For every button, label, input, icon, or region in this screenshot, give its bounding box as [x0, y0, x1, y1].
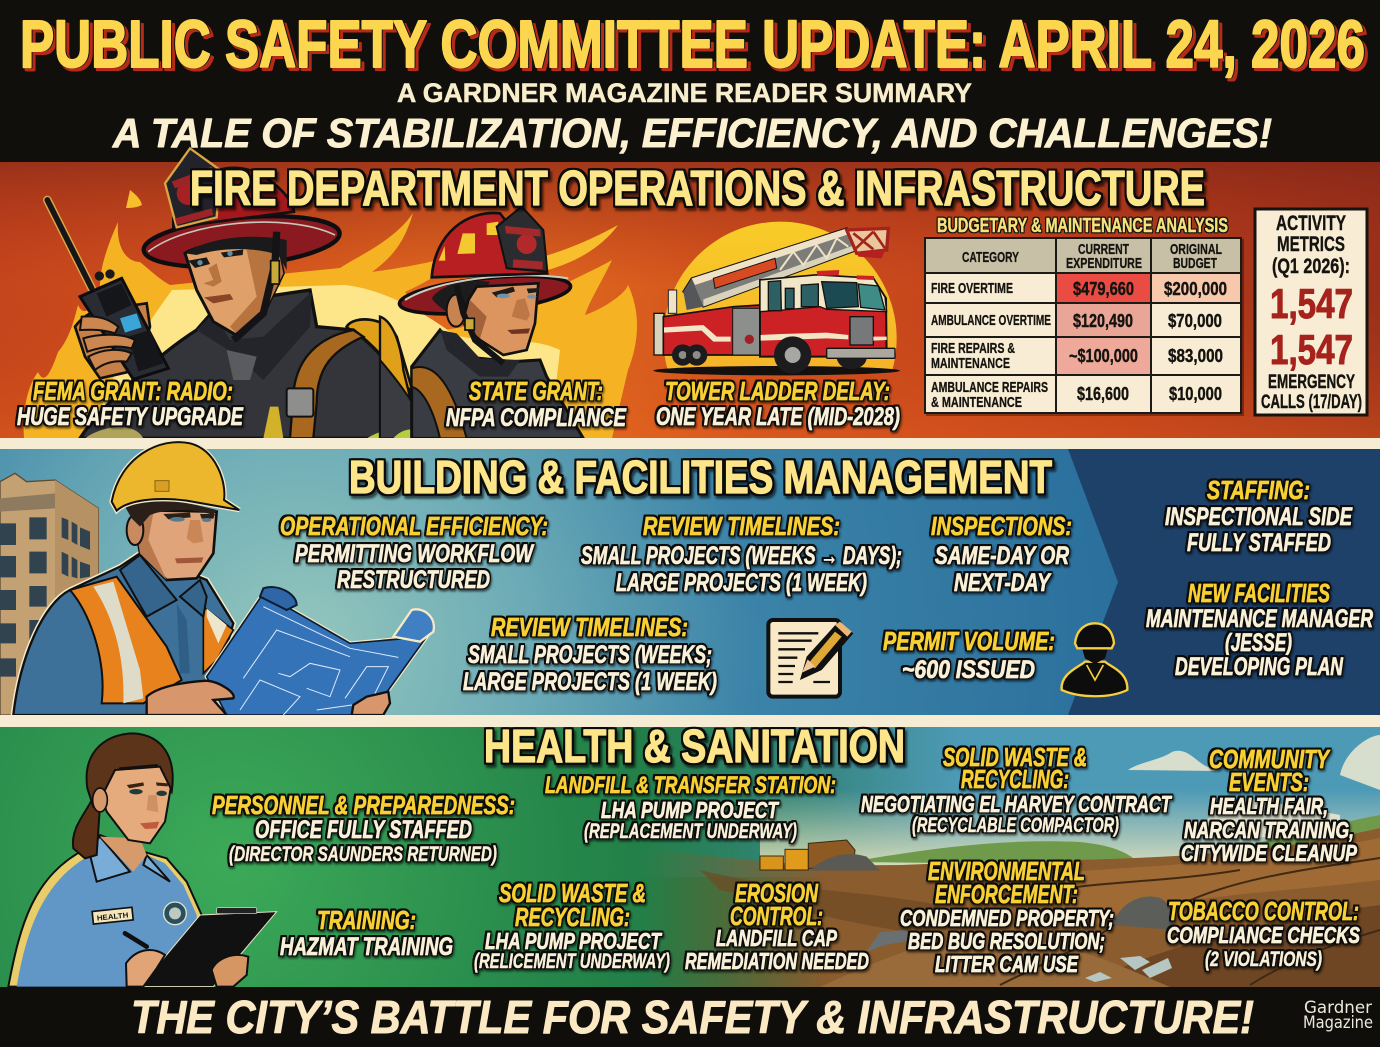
text block: solid waste lower: SOLID WASTE & — [499, 878, 646, 908]
table: budgetary and maintenance analysis: ~$100,000 — [1069, 346, 1138, 366]
text block: landfill and transfer station: LANDFILL & TRANSFER STATION: — [545, 772, 836, 799]
illustration: landfill equipment — [760, 840, 880, 871]
text block: erosion control — [685, 878, 869, 974]
illustration: building — [0, 473, 98, 715]
table: budgetary and maintenance analysis: $479,660 — [1073, 279, 1134, 299]
icon: worker silhouette — [1062, 623, 1127, 696]
illustration: firefighter in profile — [380, 207, 583, 438]
panel: activity metrics: 1,547 — [1270, 280, 1353, 327]
text block: solid waste upper: (RECYCLABLE COMPACTOR) — [912, 814, 1119, 837]
table: budgetary and maintenance analysis: $16,600 — [1077, 384, 1129, 404]
text block: personnel and preparedness: (DIRECTOR SAUNDERS RETURNED) — [229, 843, 497, 866]
text block: training: TRAINING: — [317, 905, 416, 935]
table: budgetary and maintenance analysis: CATEGORY — [962, 249, 1019, 266]
text block: operational efficiency: RESTRUCTURED — [337, 566, 490, 594]
table: budgetary and maintenance analysis: $83,000 — [1168, 346, 1223, 366]
panel: activity metrics: ACTIVITY — [1276, 212, 1346, 235]
logo: Gardner Magazine — [1303, 998, 1373, 1033]
text block: solid waste lower — [474, 878, 670, 973]
panel: footer banner — [0, 987, 1380, 1047]
text block: erosion control: LANDFILL CAP — [716, 925, 837, 951]
table: budgetary and maintenance analysis: $70,000 — [1168, 311, 1222, 331]
callout: tower ladder delay — [656, 376, 900, 431]
text block: community events: COMMUNITY — [1209, 744, 1331, 774]
panel: activity metrics: (Q1 2026): — [1272, 255, 1350, 278]
heading: budget table: BUDGETARY & MAINTENANCE ANALYSIS — [937, 215, 1228, 237]
text block: review timelines upper: SMALL PROJECTS (WEEKS → DAYS); — [581, 542, 902, 570]
callout: state grant — [446, 376, 627, 432]
text block: training: HAZMAT TRAINING — [280, 933, 453, 961]
illustration: health inspector: HEALTH — [96, 910, 129, 923]
table: budgetary and maintenance analysis: MAINTENANCE — [931, 355, 1010, 372]
text block: review timelines lower: SMALL PROJECTS (WEEKS; — [468, 641, 712, 669]
text block: review timelines lower: LARGE PROJECTS (1 WEEK) — [463, 668, 717, 696]
text block: permit volume — [883, 626, 1055, 684]
text block: permit volume: ~600 ISSUED — [902, 656, 1035, 684]
panel: header — [0, 0, 1380, 162]
text block: review timelines lower — [463, 612, 717, 696]
text block: solid waste upper: NEGOTIATING EL HARVEY CONTRACT — [861, 791, 1172, 817]
text block: staffing: STAFFING: — [1207, 475, 1310, 505]
illustration: firefighter with radio — [47, 148, 430, 438]
panel: health and sanitation — [0, 720, 1380, 987]
callout: state grant: NFPA COMPLIANCE — [446, 404, 627, 432]
panel: activity metrics: 1,547 — [1270, 326, 1353, 373]
text block: environmental enforcement: BED BUG RESOLUTION; — [908, 928, 1105, 954]
table: budgetary and maintenance analysis: AMBULANCE REPAIRS — [931, 379, 1048, 396]
panel: staffing chevron — [1068, 449, 1380, 715]
text block: solid waste upper — [861, 742, 1172, 837]
table: budgetary and maintenance analysis: $120,490 — [1073, 311, 1133, 331]
illustration: construction worker with blueprint — [13, 442, 434, 715]
text block: review timelines upper — [581, 511, 902, 597]
table: budgetary and maintenance analysis — [925, 238, 1244, 416]
table: budgetary and maintenance analysis: EXPENDITURE — [1066, 255, 1142, 272]
icon: permit document with pencil — [768, 620, 853, 697]
text block: tobacco control: (2 VIOLATIONS) — [1205, 948, 1322, 971]
illustration: flames — [24, 190, 637, 438]
text block: environmental enforcement: ENFORCEMENT: — [935, 879, 1078, 909]
callout: tower ladder delay: TOWER LADDER DELAY: — [665, 376, 890, 406]
text block: tobacco control — [1167, 896, 1360, 971]
logo: Gardner Magazine: Gardner — [1304, 998, 1372, 1018]
illustration: tower ladder fire truck — [653, 222, 900, 376]
table: budgetary and maintenance analysis: AMBULANCE OVERTIME — [931, 312, 1051, 329]
callout: state grant: STATE GRANT: — [469, 376, 603, 406]
text block: personnel and preparedness: OFFICE FULLY STAFFED — [255, 816, 472, 844]
text block: erosion control: CONTROL: — [730, 901, 823, 931]
text block: solid waste upper: SOLID WASTE & — [943, 742, 1087, 772]
text block: new facilities: (JESSE) — [1225, 629, 1292, 657]
text block: landfill and transfer station: LHA PUMP PROJECT — [601, 797, 779, 823]
panel: activity metrics: METRICS — [1277, 233, 1345, 256]
footer slogan: THE CITY’S BATTLE FOR SAFETY & INFRASTRUCTURE! — [131, 991, 1254, 1043]
text block: staffing: FULLY STAFFED — [1187, 529, 1331, 557]
text block: environmental enforcement: LITTER CAM USE — [935, 951, 1078, 977]
text block: inspections — [931, 511, 1072, 597]
illustration: landfill landscape — [640, 727, 1380, 987]
table: budgetary and maintenance analysis: BUDGET — [1173, 255, 1217, 272]
table: budgetary and maintenance analysis: $10,000 — [1169, 384, 1222, 404]
text block: environmental enforcement: ENVIRONMENTAL — [928, 856, 1085, 886]
table: budgetary and maintenance analysis: CURRENT — [1078, 241, 1129, 258]
text block: solid waste lower: (RELICEMENT UNDERWAY) — [474, 950, 670, 973]
table: budgetary and maintenance analysis: $200,000 — [1164, 279, 1227, 299]
text block: community events — [1181, 744, 1358, 866]
table: budgetary and maintenance analysis: & MAINTENANCE — [931, 394, 1022, 411]
text block: solid waste lower: RECYCLING: — [515, 902, 630, 932]
text block: permit volume: PERMIT VOLUME: — [883, 626, 1055, 656]
text block: inspections: INSPECTIONS: — [931, 511, 1072, 541]
text block: operational efficiency — [280, 511, 548, 594]
tagline: A TALE OF STABILIZATION, EFFICIENCY, AND CHALLENGES! — [112, 110, 1272, 156]
text block: review timelines upper: REVIEW TIMELINES: — [643, 511, 840, 541]
panel: building and facilities management — [0, 442, 1380, 715]
text block: staffing — [1165, 475, 1353, 557]
heading: building and facilities: BUILDING & FACILITIES MANAGEMENT — [349, 451, 1052, 503]
callout: FEMA grant — [17, 376, 244, 431]
text block: operational efficiency: PERMITTING WORKFLOW — [295, 540, 535, 568]
panel: fire department — [0, 148, 1380, 455]
subtitle: A GARDNER MAGAZINE READER SUMMARY — [397, 78, 972, 108]
text block: inspections: SAME-DAY OR — [935, 542, 1069, 570]
text block: personnel and preparedness: PERSONNEL & PREPAREDNESS: — [212, 790, 515, 820]
panel: activity metrics — [1255, 209, 1367, 415]
text block: review timelines upper: LARGE PROJECTS (1 WEEK) — [616, 569, 867, 597]
text block: erosion control: REMEDIATION NEEDED — [685, 948, 869, 974]
text block: operational efficiency: OPERATIONAL EFFICIENCY: — [280, 511, 548, 541]
text block: landfill and transfer station — [545, 772, 836, 843]
table: budgetary and maintenance analysis: ORIGINAL — [1170, 241, 1222, 258]
illustration: health inspector — [8, 733, 277, 987]
text block: landfill and transfer station: (REPLACEMENT UNDERWAY) — [584, 820, 797, 843]
table: budgetary and maintenance analysis: FIRE OVERTIME — [931, 280, 1013, 297]
text block: environmental enforcement — [900, 856, 1114, 977]
text block: solid waste lower: LHA PUMP PROJECT — [485, 928, 662, 954]
table: budgetary and maintenance analysis: FIRE REPAIRS & — [931, 340, 1015, 357]
callout: FEMA grant: FEMA GRANT: RADIO: — [33, 376, 233, 406]
text block: review timelines lower: REVIEW TIMELINES: — [491, 612, 688, 642]
callout: FEMA grant: HUGE SAFETY UPGRADE — [17, 403, 244, 431]
text block: community events: HEALTH FAIR, — [1210, 793, 1328, 819]
callout: tower ladder delay: ONE YEAR LATE (MID-2028) — [656, 403, 900, 431]
text block: community events: EVENTS: — [1229, 767, 1309, 797]
heading: health and sanitation: HEALTH & SANITATION — [484, 720, 905, 772]
text block: training — [280, 905, 453, 961]
text block: new facilities — [1146, 578, 1373, 681]
text block: environmental enforcement: CONDEMNED PROPERTY; — [900, 905, 1114, 931]
text block: personnel and preparedness — [212, 790, 515, 866]
text block: inspections: NEXT-DAY — [954, 569, 1052, 597]
text block: solid waste upper: RECYCLING: — [961, 764, 1069, 794]
text block: erosion control: EROSION — [735, 878, 819, 908]
